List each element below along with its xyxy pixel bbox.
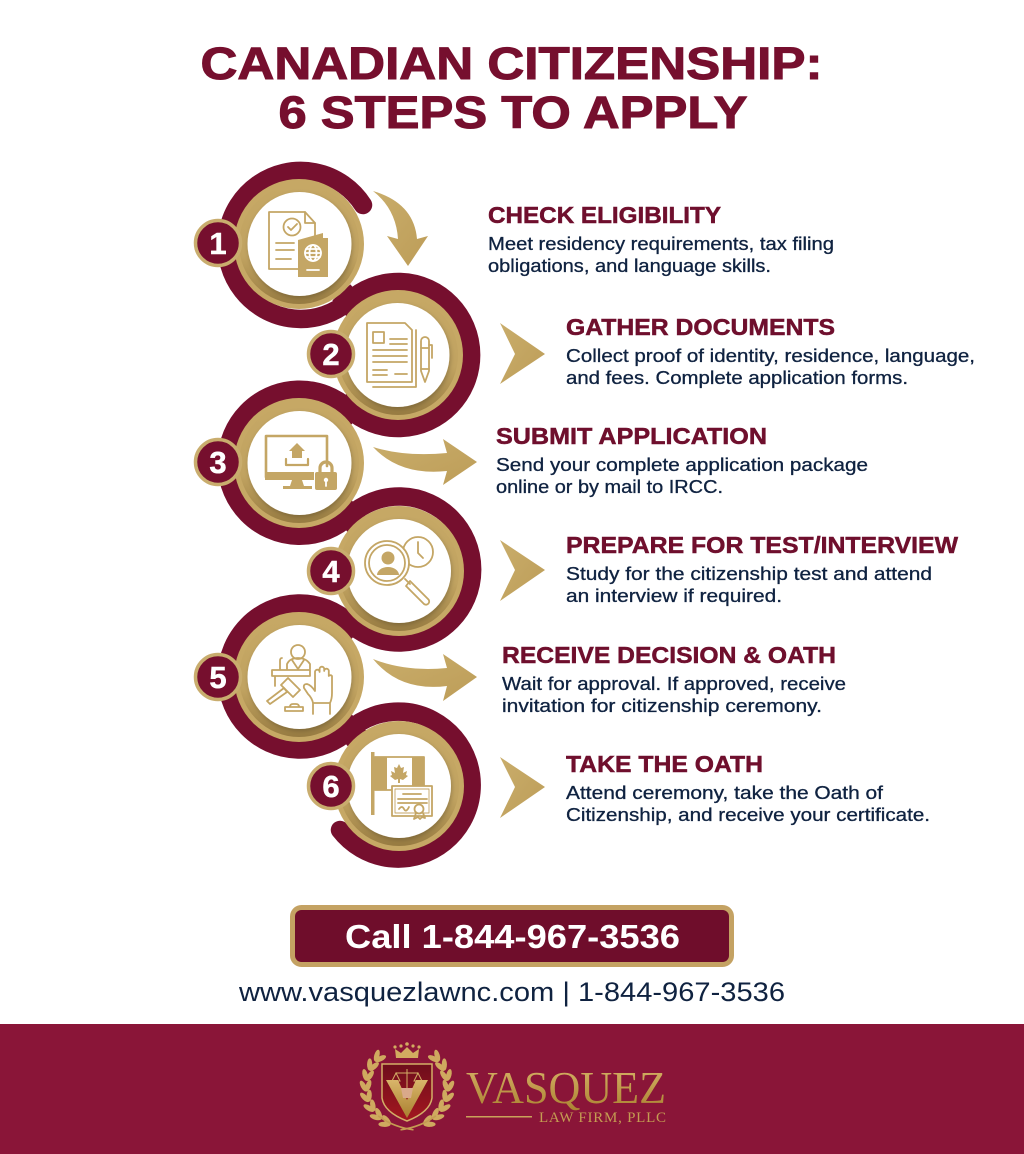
scales [392,1069,422,1092]
icon: magnifier, person and clock [365,537,433,605]
number badge 4 [308,548,354,594]
text block: gather documents: Collect proof of identity, residence, language, [566,346,975,366]
text block: check eligibility [488,202,834,276]
arrow: swoosh step 3 [373,439,477,485]
arrow: swoosh step 5 [373,654,477,701]
step 1 medallion [196,179,364,309]
laurel right [400,1047,456,1131]
text block: check eligibility: obligations, and language skills. [488,256,771,276]
title: 6 STEPS TO APPLY [278,87,748,138]
text block: take the oath: Citizenship, and receive your certificate. [566,805,930,825]
call button: Call 1-844-967-3536 [345,918,680,955]
contact line: www.vasquezlawnc.com | 1-844-967-3536 [238,977,785,1007]
text block: receive decision and oath [502,642,846,716]
arrow: chevron step 6 [500,757,545,818]
text block: receive decision and oath: invitation for citizenship ceremony. [502,696,822,716]
text block: check eligibility: Meet residency requirements, tax filing [488,234,834,254]
number badge 2 [308,332,354,376]
text block: prepare for test/interview [566,532,958,606]
icon: computer upload and lock [265,436,337,490]
title [200,38,822,138]
text block: receive decision and oath: Wait for approval. If approved, receive [502,674,846,694]
number badge 6: 6 [322,769,340,804]
number badge 5: 5 [209,660,227,695]
text block: gather documents [566,314,975,388]
step 4 medallion [308,506,464,636]
number badge 3: 3 [209,445,227,480]
icon: document and passport [269,212,328,277]
text block: take the oath: TAKE THE OATH [566,751,763,777]
icon: canadian flag and certificate [371,752,432,819]
text block: take the oath: Attend ceremony, take the Oath of [566,783,884,803]
step 5 medallion [196,612,364,742]
number badge 2: 2 [322,337,340,372]
divider [466,1116,532,1118]
icon: documents and pen [367,323,432,387]
text block: take the oath [566,751,930,825]
icon: judge, gavel and raised hand [267,645,332,714]
text block: submit application [496,423,868,497]
number badge 1 [196,220,240,266]
arrow: chevron step 4 [500,540,545,601]
text block: gather documents: and fees. Complete application forms. [566,368,908,388]
number badge 5 [196,654,240,700]
call button [292,908,732,964]
title: CANADIAN CITIZENSHIP: [200,38,822,89]
number badge 1: 1 [209,226,227,261]
step 2 medallion [308,290,463,420]
logo [358,1042,666,1131]
firm suffix: LAW FIRM, PLLC [539,1110,666,1126]
text block: prepare for test/interview: Study for the citizenship test and attend [566,564,932,584]
arrow: chevron step 2 [500,323,545,384]
step 6 medallion [308,721,464,851]
arrow: curved down from step 1 [373,191,428,266]
number badge 6 [308,764,354,808]
pillar [401,1088,413,1098]
laurel left [358,1047,414,1131]
number badge 4: 4 [322,554,340,589]
number badge 3 [196,440,240,484]
crown [393,1042,421,1058]
step 3 medallion [196,398,364,528]
text block: check eligibility: CHECK ELIGIBILITY [488,202,721,228]
text block: prepare for test/interview: an interview if required. [566,586,782,606]
text block: prepare for test/interview: PREPARE FOR TEST/INTERVIEW [566,532,958,558]
text block: receive decision and oath: RECEIVE DECISION & OATH [502,642,836,668]
firm name: VASQUEZ [466,1062,666,1113]
footer band [0,1024,1024,1154]
shield [382,1064,432,1121]
text block: submit application: Send your complete application package [496,455,868,475]
text block: gather documents: GATHER DOCUMENTS [566,314,835,340]
letter mark [386,1080,428,1118]
winding maroon ribbon [227,171,472,859]
text block: submit application: online or by mail to IRCC. [496,477,723,497]
text block: submit application: SUBMIT APPLICATION [496,423,767,449]
